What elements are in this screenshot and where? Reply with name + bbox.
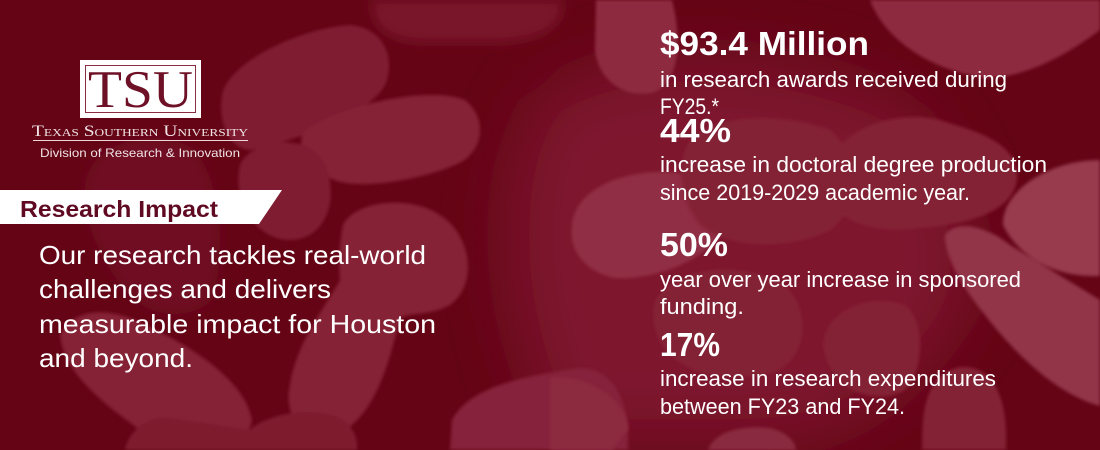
intro paragraph: challenges and delivers xyxy=(39,274,331,304)
intro paragraph xyxy=(39,240,436,373)
stat: doctoral degrees xyxy=(660,112,1047,205)
university name: Texas Southern University xyxy=(32,123,248,140)
stat: doctoral degrees: 44% xyxy=(660,112,731,149)
stat: research awards: $93.4 Million xyxy=(660,25,869,62)
stat: research awards: FY25.* xyxy=(660,94,719,119)
stat: doctoral degrees: since 2019-2029 academic year. xyxy=(660,180,970,205)
division name: Division of Research & Innovation xyxy=(40,146,240,160)
stat: research expenditures: 17% xyxy=(660,326,720,363)
heading ribbon xyxy=(0,190,282,224)
stat: research awards: in research awards received during xyxy=(660,67,1007,92)
stat: doctoral degrees: increase in doctoral degree production xyxy=(660,152,1047,177)
stat: sponsored funding: 50% xyxy=(660,226,728,263)
stat: research awards xyxy=(660,25,1007,119)
intro paragraph: measurable impact for Houston xyxy=(39,309,436,339)
logo box: TSU xyxy=(88,61,193,119)
heading ribbon: Research Impact xyxy=(20,196,218,222)
stat: research expenditures: between FY23 and FY24. xyxy=(660,394,905,419)
stat: sponsored funding: funding. xyxy=(660,294,744,319)
logo: Texas Southern University xyxy=(32,60,248,160)
stat: sponsored funding: year over year increase in sponsored xyxy=(660,267,1021,292)
stat: research expenditures xyxy=(660,326,996,419)
intro paragraph: Our research tackles real-world xyxy=(39,240,426,270)
stat: research expenditures: increase in research expenditures xyxy=(660,366,996,391)
stat: sponsored funding xyxy=(660,226,1021,319)
intro paragraph: and beyond. xyxy=(39,343,193,373)
